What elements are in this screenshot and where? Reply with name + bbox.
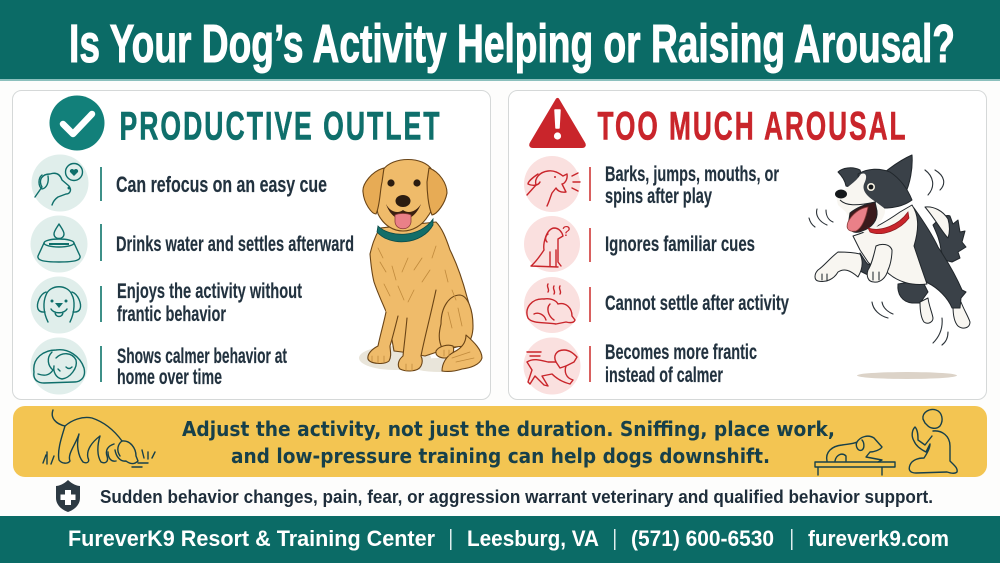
text: advice: Adjust the activity, not just the duration. Sniffing, place work,	[182, 417, 835, 441]
icon: running dog	[524, 338, 580, 394]
text: barks: spins after play	[605, 185, 712, 208]
divider	[589, 287, 591, 322]
footer bar: (571) 600-6530	[631, 526, 774, 551]
divider	[589, 346, 591, 382]
hind paw	[436, 345, 454, 358]
icon: warning triangle	[531, 100, 584, 146]
tongue	[847, 207, 868, 231]
text: drinks: Drinks water and settles afterward	[116, 233, 354, 256]
collar	[868, 212, 909, 234]
text: enjoys: frantic behavior	[117, 303, 226, 326]
text: refocus: Can refocus on an easy cue	[116, 172, 327, 197]
fur lines	[372, 246, 474, 371]
dark body	[910, 208, 966, 308]
right foreleg	[398, 286, 437, 371]
left foreleg	[815, 252, 862, 282]
text: calmer: home over time	[117, 366, 222, 389]
header banner	[0, 0, 1000, 81]
text: enjoys	[117, 280, 302, 326]
dark shoulder between legs	[858, 253, 870, 276]
text: calmer: Shows calmer behavior at	[117, 345, 287, 368]
collar	[377, 219, 433, 242]
text: frantic: instead of calmer	[605, 364, 723, 387]
tail	[442, 335, 482, 371]
icon: confused sitting dog: ?	[562, 223, 570, 240]
left foreleg	[368, 310, 399, 363]
divider	[100, 286, 102, 322]
shadow	[857, 372, 957, 379]
icon: dog on place table with trainer	[815, 409, 957, 475]
illustration: border collie jumping	[809, 155, 970, 379]
divider	[100, 346, 102, 382]
text: barks	[605, 163, 779, 208]
icon: water bowl	[30, 216, 88, 272]
panel: productive outlet	[12, 90, 490, 400]
icon: sleeping dog	[30, 338, 88, 394]
text: barks: Barks, jumps, mouths, or	[605, 163, 779, 186]
icon: medical shield	[56, 480, 80, 512]
icon: check mark	[50, 96, 104, 150]
icon: sniffing dog	[43, 410, 155, 467]
icon: confused sitting dog	[524, 216, 580, 272]
panel: too much arousal	[508, 90, 986, 400]
text: frantic	[605, 341, 757, 387]
text: enjoys: Enjoys the activity without	[117, 280, 302, 303]
text: advice: and low-pressure training can help dogs downshift.	[231, 444, 770, 468]
white blaze and muzzle	[836, 173, 885, 233]
icon: dog with heart bubble	[32, 154, 88, 212]
tail	[933, 215, 966, 262]
divider	[589, 228, 591, 262]
notice: veterinary support: Sudden behavior changes, pain, fear, or aggression warrant veterinary and qualified behavior support.	[100, 487, 933, 507]
divider	[100, 167, 102, 201]
notice: veterinary support	[56, 480, 933, 512]
head	[376, 160, 435, 231]
text: advice	[182, 417, 835, 468]
ears	[885, 155, 912, 194]
illustration: golden retriever sitting	[359, 160, 482, 372]
divider	[100, 224, 102, 261]
footer bar: Leesburg, VA	[467, 526, 599, 551]
footer bar: fureverk9.com	[808, 526, 949, 551]
text: frantic: Becomes more frantic	[605, 341, 757, 364]
hind legs	[898, 280, 928, 303]
white chest and belly	[853, 205, 927, 285]
ears	[363, 168, 384, 214]
divider	[589, 167, 591, 201]
text: calmer	[117, 345, 287, 389]
open mouth	[848, 202, 877, 232]
motion lines	[809, 170, 948, 345]
text: cannot settle: Cannot settle after activity	[605, 292, 789, 315]
icon: barking dog	[524, 156, 580, 212]
text: ignores: Ignores familiar cues	[605, 233, 755, 256]
heading: productive outlet: PRODUCTIVE OUTLET	[120, 104, 442, 148]
body	[370, 222, 473, 356]
footer bar: FureverK9 Resort & Training Center	[68, 526, 435, 551]
callout banner	[13, 406, 987, 477]
haunch	[439, 295, 473, 348]
head	[858, 169, 912, 208]
right foreleg	[867, 244, 892, 282]
icon: restless lying dog	[524, 277, 580, 333]
icon: happy dog face	[30, 276, 88, 334]
footer bar	[0, 516, 1000, 563]
